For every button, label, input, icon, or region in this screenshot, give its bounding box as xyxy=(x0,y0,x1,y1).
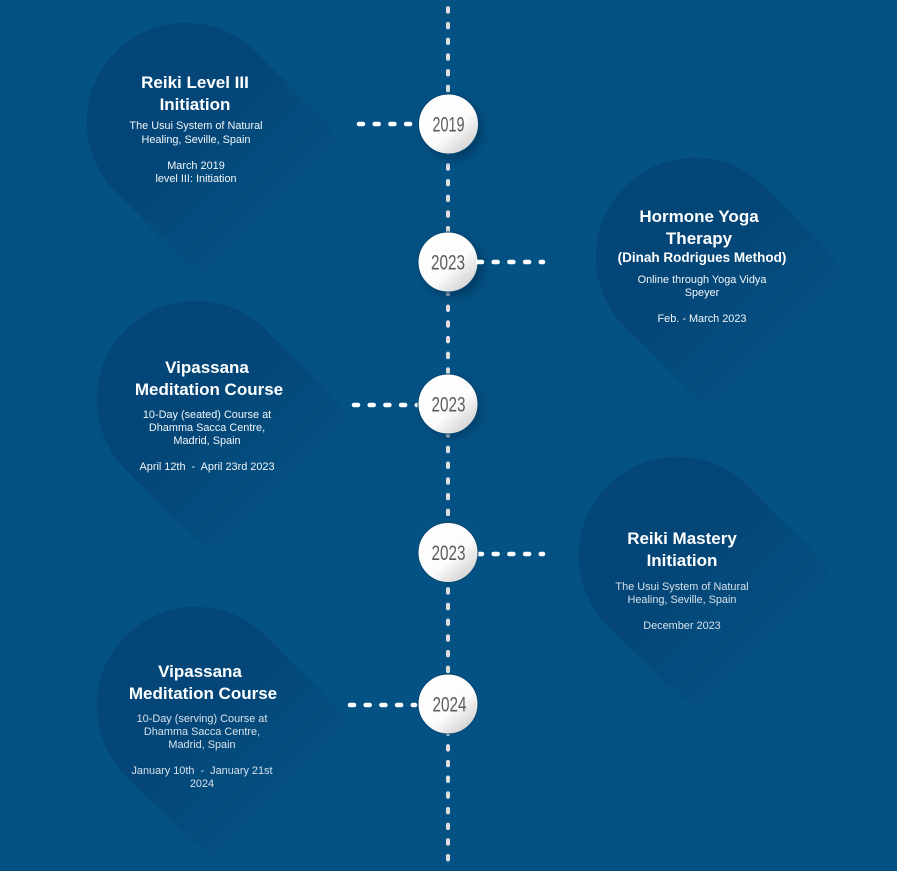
text block: Hormone Yoga details: Online through Yoga Vidya xyxy=(638,274,766,286)
text block: serving course details: 2024 xyxy=(190,778,214,790)
panel: Reiki Level III Initiation xyxy=(87,23,348,284)
panel: Reiki Mastery Initiation xyxy=(579,457,840,718)
text block: seated course details: 10-Day (seated) Course at xyxy=(143,409,271,421)
text block: Reiki Level III details: March 2019 xyxy=(167,160,225,172)
marker: 2019 xyxy=(418,94,483,159)
heading: Vipassana Meditation Course: Meditation Course xyxy=(135,380,283,399)
panel: Hormone Yoga Therapy xyxy=(596,158,857,419)
text block: Reiki Level III details: level III: Initiation xyxy=(155,173,237,185)
heading: Hormone Yoga Therapy: Therapy xyxy=(666,229,733,248)
connector: 2024 xyxy=(350,703,415,707)
text block: serving course details: 10-Day (serving) Course at xyxy=(137,713,267,725)
heading: Vipassana Meditation Course: Vipassana xyxy=(165,358,249,377)
text block: seated course details: April 12th - April 23rd 2023 xyxy=(140,461,274,473)
marker: 2019: 2019 xyxy=(432,114,464,136)
heading: Reiki Mastery Initiation: Initiation xyxy=(647,551,717,570)
text block: Reiki Level III details: Healing, Seville, Spain xyxy=(142,134,250,146)
text block: serving course details: January 10th - January 21st xyxy=(131,765,273,777)
vertical dashed timeline xyxy=(446,8,450,869)
marker: 2023 Vipassana xyxy=(418,374,482,438)
heading: Reiki Mastery Initiation: Reiki Mastery xyxy=(627,529,737,548)
marker: 2023 Reiki Mastery: 2023 xyxy=(432,542,466,565)
text block: Reiki Level III details: The Usui System of Natural xyxy=(129,120,263,132)
subheading: Dinah Rodrigues Method: (Dinah Rodrigues Method) xyxy=(618,250,786,265)
text block: seated course details: Dhamma Sacca Centre, xyxy=(149,422,265,434)
connector: 2023 Vipassana xyxy=(354,403,418,407)
panel: Vipassana serving course xyxy=(97,607,358,868)
text block: seated course details: Madrid, Spain xyxy=(173,435,241,447)
panel: Vipassana seated course xyxy=(97,301,358,562)
text block: serving course details: Dhamma Sacca Centre, xyxy=(144,726,260,738)
marker: 2023 Reiki Mastery xyxy=(418,522,478,582)
connector: 2019 xyxy=(359,122,414,126)
marker: 2023 Hormone Yoga xyxy=(418,232,483,297)
marker: 2024 xyxy=(418,674,478,734)
heading: Vipassana Meditation Course serving: Meditation Course xyxy=(129,684,277,703)
marker: 2023 Vipassana: 2023 xyxy=(432,394,466,416)
heading: Hormone Yoga Therapy: Hormone Yoga xyxy=(639,207,759,226)
connector: 2023 Reiki Mastery xyxy=(478,552,543,556)
text block: Hormone Yoga details: Speyer xyxy=(685,287,720,299)
heading: Reiki Level III Initiation: Initiation xyxy=(160,95,230,114)
connector: 2023 Hormone Yoga xyxy=(478,260,543,264)
text block: Reiki Mastery details: The Usui System of Natural xyxy=(615,581,749,593)
text block: Reiki Mastery details: Healing, Seville, Spain xyxy=(628,594,736,606)
heading: Vipassana Meditation Course serving: Vipassana xyxy=(158,662,242,681)
marker: 2023 Hormone Yoga: 2023 xyxy=(431,252,465,274)
text block: serving course details: Madrid, Spain xyxy=(168,739,236,751)
heading: Reiki Level III Initiation: Reiki Level III xyxy=(141,73,249,92)
marker: 2024: 2024 xyxy=(432,694,467,716)
text block: Reiki Mastery details: December 2023 xyxy=(643,620,721,632)
text block: Hormone Yoga details: Feb. - March 2023 xyxy=(658,313,746,325)
